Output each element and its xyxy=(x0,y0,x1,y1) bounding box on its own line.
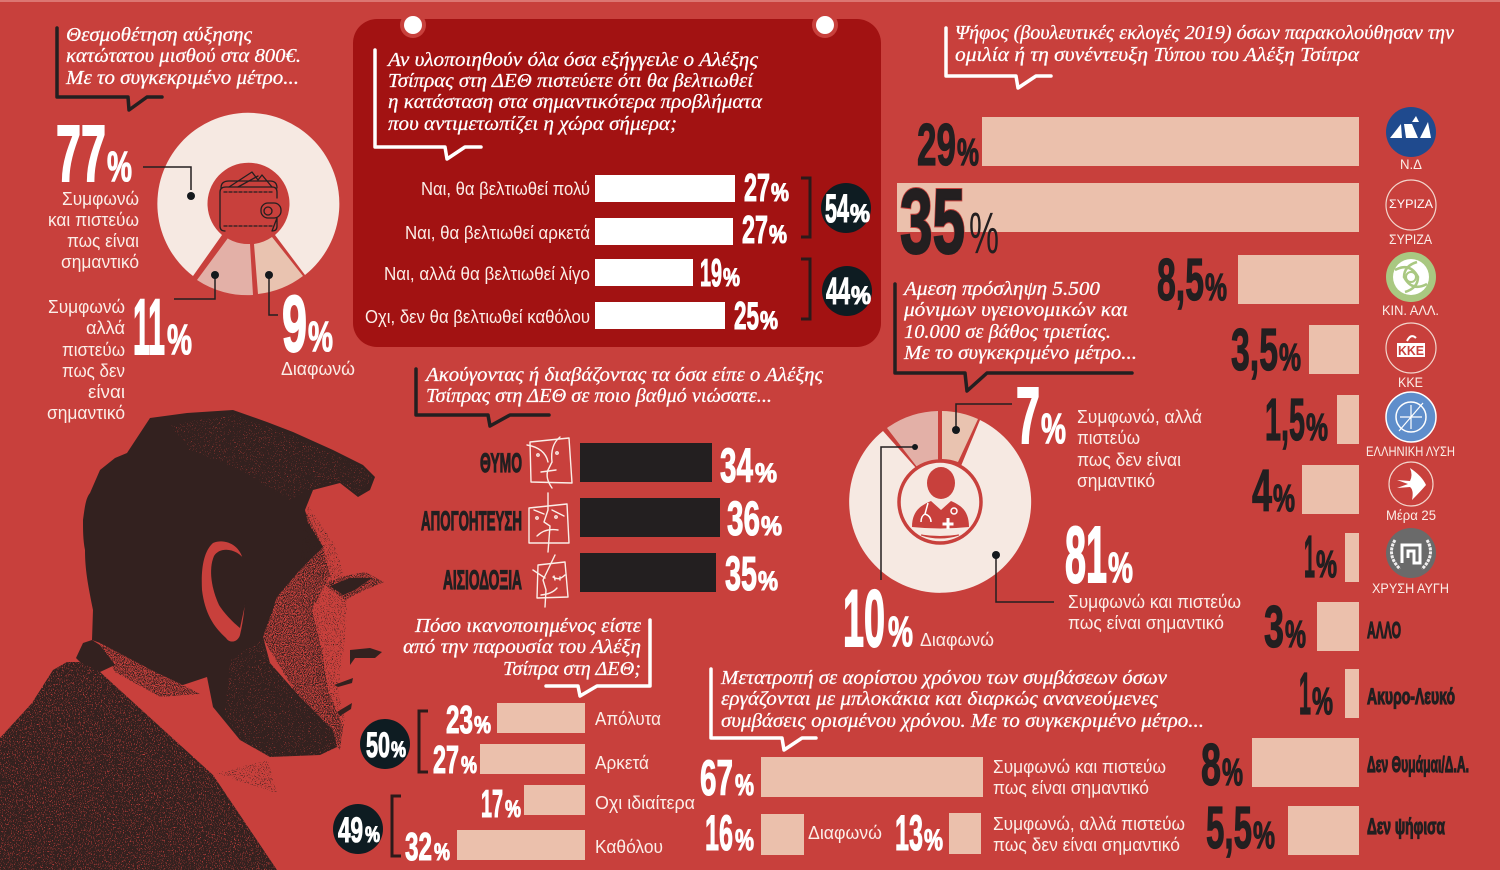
bar values: satisfaction: % xyxy=(474,712,491,739)
bar values: expectations: 19 xyxy=(700,252,722,295)
heading: contracts question: Μετατροπή σε αορίστου χρόνου των συμβάσεων όσων xyxy=(720,667,1167,689)
bar values: contracts xyxy=(700,750,943,861)
bar chart: satisfaction xyxy=(457,703,585,860)
other vote labels xyxy=(1367,617,1469,839)
panel: feelings xyxy=(416,364,824,607)
icon: SYRIZA: ΣΥΡΙΖΑ xyxy=(1389,199,1433,211)
icon: ND xyxy=(1386,107,1436,157)
badge: 49% xyxy=(333,804,383,854)
bar values: expectations: % xyxy=(723,264,740,292)
bar values: vote: 1,5 xyxy=(1265,387,1305,453)
label: agree but not important: πως δεν xyxy=(62,361,125,381)
bar values: vote: 4 xyxy=(1252,458,1272,524)
bar labels: satisfaction: Οχι ιδιαίτερα xyxy=(595,793,695,813)
panel: vote breakdown xyxy=(897,22,1469,861)
bar values: satisfaction: % xyxy=(461,752,477,779)
label: agree but not important: σημαντικό xyxy=(1077,471,1155,491)
bar values: vote xyxy=(917,112,1337,861)
bar labels: expectations: Ναι, αλλά θα βελτιωθεί λίγο xyxy=(384,264,590,284)
bar chart: contracts xyxy=(761,757,983,855)
heading: health question: μόνιμων υγειονομικών και xyxy=(903,299,1128,321)
other vote labels: ΑΛΛΟ xyxy=(1367,617,1401,643)
badge: 49%: % xyxy=(365,822,380,847)
label: agree and important: Συμφωνώ και πιστεύω xyxy=(1068,592,1241,612)
label: agree but not important: είναι xyxy=(88,382,125,402)
portrait silhouette xyxy=(0,410,384,870)
bar labels: expectations xyxy=(365,179,590,327)
bar values: vote: 3 xyxy=(1264,594,1284,660)
bar values: satisfaction: 32 xyxy=(405,826,432,869)
heading: expectations question: Τσίπρας στη ΔΕΘ πιστεύετε ότι θα βελτιωθεί xyxy=(388,70,753,92)
other vote labels: Δεν ψήφισα xyxy=(1367,814,1445,839)
party label: MeRA25: Μέρα 25 xyxy=(1386,508,1436,523)
bar values: satisfaction: % xyxy=(505,796,521,823)
bar values: vote: % xyxy=(1306,407,1328,449)
heading: contracts question: εργάζονται με μπλοκάκια και διαρκώς ανανεούμενες xyxy=(721,688,1159,710)
bar labels: contracts: Διαφωνώ xyxy=(808,823,882,843)
heading: minimum wage question: Θεσμοθέτηση αύξησης xyxy=(66,24,253,46)
panel: feelings: ΑΠΟΓΟΗΤΕΥΣΗ xyxy=(421,506,522,536)
bracket: total low xyxy=(801,259,810,319)
speech bubble: vote question xyxy=(946,28,1051,88)
heading: health question: Αμεση πρόσληψη 5.500 xyxy=(902,278,1100,300)
heading: vote question: ομιλία ή τη συνέντευξη Τύπου του Αλέξη Τσίπρα xyxy=(955,44,1360,66)
bar values: satisfaction: 23 xyxy=(446,699,473,742)
bar values: expectations: % xyxy=(769,221,787,249)
label: agree but not important: αλλά xyxy=(86,318,125,338)
value: 35% highlighted: 35 xyxy=(900,171,965,273)
bar values: vote: % xyxy=(957,132,979,174)
panel: expectations xyxy=(353,12,881,347)
heading: satisfaction question: Πόσο ικανοποιημένος είστε xyxy=(414,615,641,637)
bar labels: satisfaction: Απόλυτα xyxy=(595,709,661,729)
bar labels: contracts: πως είναι σημαντικό xyxy=(993,778,1149,798)
bar values: contracts: 13 xyxy=(895,805,923,861)
panel: contracts xyxy=(700,667,1204,861)
bar labels: satisfaction: Αρκετά xyxy=(595,753,649,773)
heading: expectations question: Αν υλοποιηθούν όλα όσα εξήγγειλε ο Αλέξης xyxy=(386,49,759,71)
connector: 7% xyxy=(952,404,1012,434)
speech bubble: health question xyxy=(895,284,1132,391)
bracket: 49% xyxy=(392,796,401,856)
bar values: vote: 1 xyxy=(1299,661,1311,727)
bar values: satisfaction xyxy=(405,699,521,869)
value: 81%: % xyxy=(1108,544,1133,592)
value: 10%: 10 xyxy=(843,574,885,664)
label: agree and important: Συμφωνώ xyxy=(62,189,139,209)
label: agree and important: σημαντικό xyxy=(61,252,139,272)
bar labels: feelings: ΑΙΣΙΟΔΟΞΙΑ xyxy=(443,565,522,595)
bar values: vote: % xyxy=(1316,544,1337,586)
value: 9%: 9 xyxy=(282,279,307,368)
speech bubble: minimum wage question xyxy=(57,28,162,110)
bar values: expectations: % xyxy=(771,179,789,207)
bar values: vote: % xyxy=(1222,752,1243,794)
value: 10%: % xyxy=(888,608,913,656)
bar chart: expectations xyxy=(595,175,735,329)
bar values: contracts: % xyxy=(735,769,754,802)
icon: Greek Solution xyxy=(1386,392,1436,442)
bar values: feelings: 35 xyxy=(725,548,757,601)
value: 9%: % xyxy=(308,313,333,361)
pins xyxy=(400,12,838,38)
bar values: vote: 5,5 xyxy=(1206,795,1252,861)
bracket: total yes xyxy=(801,178,810,237)
speech bubble: contracts question xyxy=(711,669,816,750)
label: agree but not important: Συμφωνώ xyxy=(48,297,125,317)
bar values: satisfaction: 17 xyxy=(481,783,503,826)
value: 7%: % xyxy=(1041,405,1066,453)
heading: minimum wage question: Με το συγκεκριμένο μέτρο... xyxy=(65,67,299,89)
bar values: feelings xyxy=(720,440,782,601)
heading: contracts question: συμβάσεις ορισμένου χρόνου. Με το συγκεκριμένο μέτρο... xyxy=(721,710,1204,732)
value: 7%: 7 xyxy=(1016,371,1040,460)
bar values: feelings: % xyxy=(755,458,777,488)
label: disagree: Διαφωνώ xyxy=(281,359,355,379)
bar values: contracts: % xyxy=(924,824,943,857)
bar labels: feelings: ΘΥΜΟ xyxy=(480,448,522,478)
party label: KINAL: ΚΙΝ. ΑΛΛ. xyxy=(1382,303,1439,318)
connector: 10% xyxy=(881,444,918,580)
bar values: vote: 3,5 xyxy=(1231,317,1278,383)
speech bubble: expectations question xyxy=(375,50,481,159)
bar values: vote: 8 xyxy=(1201,732,1221,798)
panel background xyxy=(353,19,881,347)
speech bubble: satisfaction question xyxy=(546,620,650,696)
connector: 81% xyxy=(992,551,1054,602)
label: agree but not important: Συμφωνώ, αλλά xyxy=(1077,407,1202,427)
heading: health question: 10.000 σε βάθος τριετίας. xyxy=(904,321,1111,343)
icon: KKE xyxy=(1386,323,1436,373)
value: 81%: 81 xyxy=(1065,510,1107,599)
party label: Golden Dawn: ΧΡΥΣΗ ΑΥΓΗ xyxy=(1372,581,1449,596)
badge: 50% xyxy=(360,719,410,769)
heading: feelings question: Ακούγοντας ή διαβάζοντας τα όσα είπε ο Αλέξης xyxy=(424,364,824,386)
donut chart: wage xyxy=(157,113,339,295)
icon: KINAL xyxy=(1386,252,1436,302)
bar values: expectations: % xyxy=(760,307,778,335)
heading: expectations question: που αντιμετωπίζει η χώρα σήμερα; xyxy=(388,113,677,135)
bar labels: feelings xyxy=(421,448,522,595)
bar values: contracts: 16 xyxy=(705,805,733,861)
bar values: vote: % xyxy=(1273,478,1295,520)
bar values: contracts: % xyxy=(735,824,754,857)
bar values: vote: % xyxy=(1279,337,1301,379)
icon: Golden Dawn xyxy=(1386,528,1436,578)
label: agree and important: και πιστεύω xyxy=(48,210,139,230)
bar chart: vote xyxy=(897,117,1359,855)
bar labels: satisfaction xyxy=(595,709,695,857)
icon: wallet xyxy=(208,164,288,244)
icon: optimistic face xyxy=(533,555,568,607)
icon: SYRIZA xyxy=(1386,180,1436,230)
bar values: feelings: % xyxy=(758,566,778,596)
bar values: feelings: % xyxy=(761,511,782,541)
icon: MeRA25 xyxy=(1389,462,1433,506)
bar values: contracts: 67 xyxy=(700,750,733,806)
icon: doctor xyxy=(899,461,981,543)
bar values: feelings: 36 xyxy=(727,493,760,546)
badge: 54%: % xyxy=(850,200,870,228)
badge: 49%: 49 xyxy=(338,811,363,850)
panel: health staff donut xyxy=(843,278,1241,664)
badge: 44%: % xyxy=(851,282,871,310)
bar labels: expectations: Ναι, θα βελτιωθεί πολύ xyxy=(421,179,590,199)
value: 35% highlighted: 35 xyxy=(900,171,965,273)
party label: Greek Solution: ΕΛΛΗΝΙΚΗ ΛΥΣΗ xyxy=(1366,444,1455,459)
bar labels: contracts: Συμφωνώ, αλλά πιστεύω xyxy=(993,814,1185,834)
bar values: satisfaction: 27 xyxy=(433,739,459,782)
heading: satisfaction question: από την παρουσία του Αλέξη xyxy=(403,636,641,658)
label: agree and important: πως είναι σημαντικό xyxy=(1068,613,1224,633)
bar labels: satisfaction: Καθόλου xyxy=(595,837,663,857)
panel: satisfaction xyxy=(333,615,695,869)
bar values: vote: 8,5 xyxy=(1157,247,1204,313)
label: agree but not important: πιστεύω xyxy=(1077,428,1140,448)
value: 35% highlighted: % xyxy=(969,201,999,266)
heading: minimum wage question: κατώτατου μισθού στα 800€. xyxy=(66,45,301,67)
heading: feelings question: Τσίπρας στη ΔΕΘ σε ποιο βαθμό νιώσατε... xyxy=(426,385,772,407)
bar values: vote: % xyxy=(1312,681,1333,723)
bracket: 50% xyxy=(419,711,428,772)
heading: expectations question: η κατάσταση στα σημαντικότερα προβλήματα xyxy=(388,91,763,113)
bar values: expectations: 27 xyxy=(742,209,768,252)
value: 77%: % xyxy=(107,143,132,191)
label: disagree: Διαφωνώ xyxy=(920,630,994,650)
badge: 50%: % xyxy=(391,737,406,762)
bar values: vote: 1 xyxy=(1304,524,1315,590)
badge: 44%: 44 xyxy=(826,271,850,313)
label: agree but not important: πιστεύω xyxy=(62,340,125,360)
bar labels: expectations: Οχι, δεν θα βελτιωθεί καθόλου xyxy=(365,307,590,327)
heading: satisfaction question: Τσίπρα στη ΔΕΘ; xyxy=(503,658,641,680)
connector: 9% xyxy=(265,271,278,315)
label: agree and important: πως είναι xyxy=(67,231,139,251)
icon: KKE: ΚΚΕ xyxy=(1398,343,1424,358)
label: agree but not important: πως δεν είναι xyxy=(1077,450,1181,470)
badge: 50%: 50 xyxy=(366,726,390,765)
icon: disappointed face xyxy=(529,493,569,552)
label: agree but not important: σημαντικό xyxy=(47,403,125,423)
bar labels: expectations: Ναι, θα βελτιωθεί αρκετά xyxy=(405,223,590,243)
bar values: vote: % xyxy=(1285,614,1306,656)
bar values: vote: % xyxy=(1205,267,1227,309)
heading: vote question: Ψήφος (βουλευτικές εκλογές 2019) όσων παρακολούθησαν την xyxy=(955,22,1454,44)
value: 11%: 11 xyxy=(133,282,165,371)
party label: KKE: ΚΚΕ xyxy=(1398,375,1423,390)
bar values: satisfaction: % xyxy=(434,839,450,866)
bar values: vote: 29 xyxy=(917,112,956,178)
icon: angry face xyxy=(527,437,572,488)
heading: health question: Με το συγκεκριμένο μέτρο... xyxy=(903,342,1137,364)
panel: minimum wage donut xyxy=(47,24,355,423)
connector: 77% xyxy=(143,167,195,200)
donut chart: health xyxy=(849,411,1031,593)
value: 77%: 77 xyxy=(56,109,106,198)
bar values: vote: % xyxy=(1253,815,1275,857)
bar chart: feelings xyxy=(580,443,720,592)
bar values: expectations xyxy=(700,167,789,338)
bar labels: contracts: πως δεν είναι σημαντικό xyxy=(993,835,1180,855)
party label: SYRIZA: ΣΥΡΙΖΑ xyxy=(1389,232,1432,247)
badge: 54%: 54 xyxy=(825,187,849,231)
bar labels: contracts: Συμφωνώ και πιστεύω xyxy=(993,757,1166,777)
bar labels: contracts xyxy=(808,757,1185,855)
bar values: feelings: 34 xyxy=(720,440,753,493)
bar values: expectations: 25 xyxy=(734,295,759,338)
value: 11%: % xyxy=(167,316,192,364)
speech bubble: feelings question xyxy=(416,369,549,426)
bar values: expectations: 27 xyxy=(744,167,770,210)
connector: 11% xyxy=(174,271,219,299)
party label: ND: Ν.Δ xyxy=(1400,157,1422,172)
